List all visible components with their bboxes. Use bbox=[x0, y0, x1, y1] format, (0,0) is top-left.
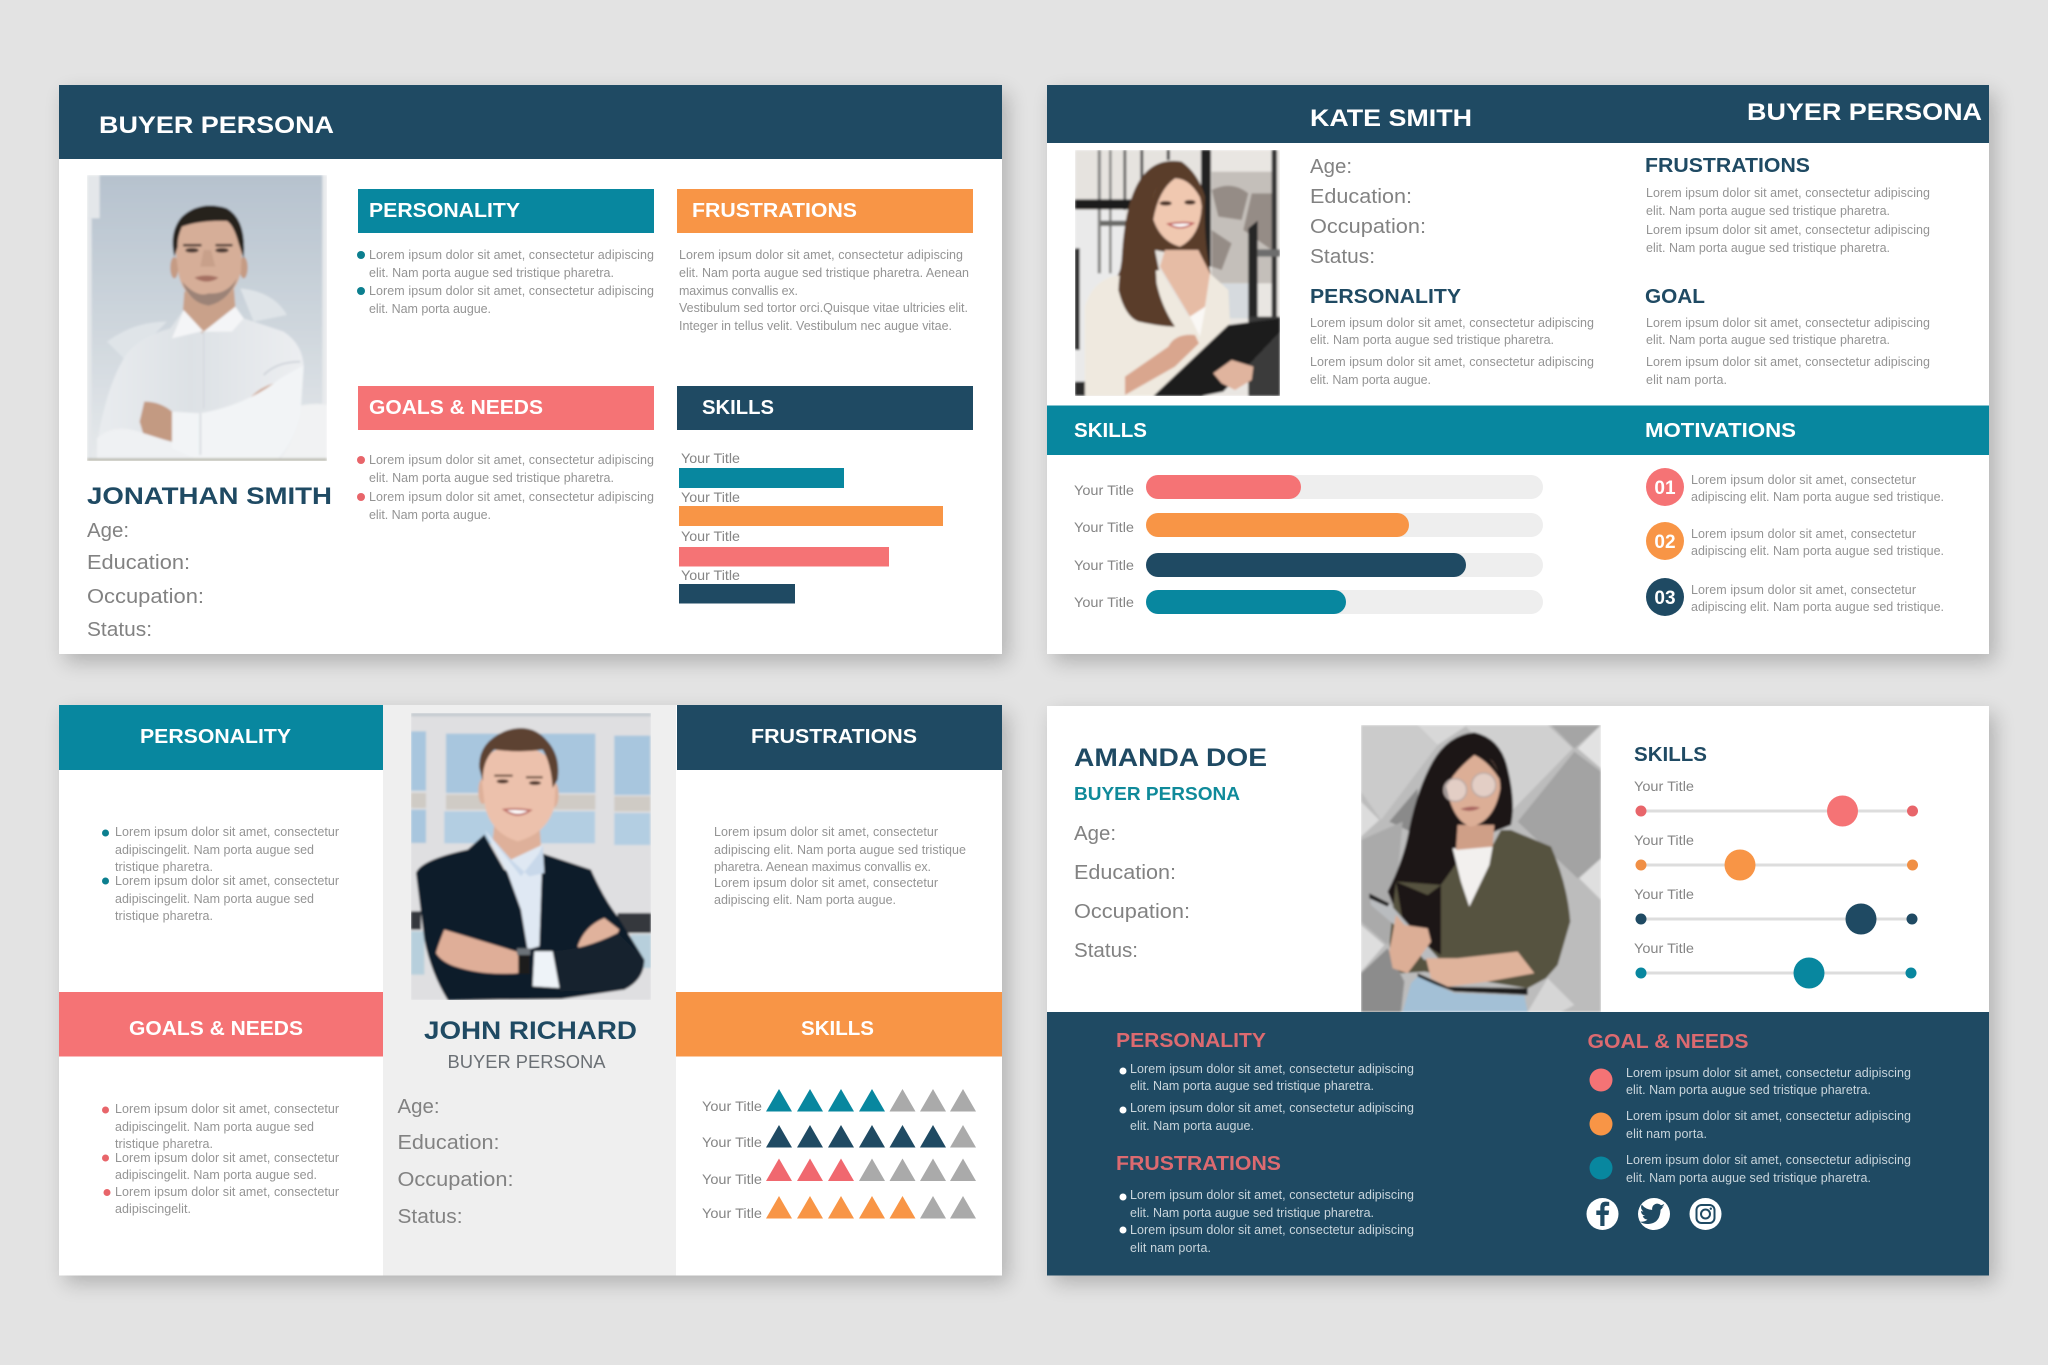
section: frustrations: elit. Nam porta augue sed tristique pharetra. Aenean bbox=[679, 266, 969, 280]
chart: skills sliders: Your Title bbox=[1634, 886, 1694, 902]
section: goals and needs: GOALS & NEEDS bbox=[369, 397, 543, 419]
section: goals and needs: elit. Nam porta augue. bbox=[369, 508, 491, 522]
section: frustrations: Lorem ipsum dolor sit amet, consectetur adipiscing bbox=[1646, 223, 1930, 237]
section: skills triangle rating: Your Title bbox=[702, 1134, 762, 1150]
demographics list: Education: bbox=[398, 1132, 500, 1154]
demographics list: Status: bbox=[398, 1206, 462, 1228]
demographics list bbox=[87, 520, 204, 641]
panel: Jonathan Smith persona bbox=[59, 85, 1008, 662]
section: skills triangle rating bbox=[676, 992, 1002, 1221]
chart: skills sliders: Your Title bbox=[1634, 778, 1694, 794]
list: motivations: adipiscing elit. Nam porta augue sed tristique. bbox=[1691, 600, 1944, 614]
section: personality: elit. Nam porta augue sed tristique pharetra. bbox=[1310, 333, 1554, 347]
demographics list: Age: bbox=[1074, 823, 1116, 845]
demographics list: Occupation: bbox=[87, 586, 204, 608]
section: goal bbox=[1645, 286, 1930, 387]
section: frustrations: elit. Nam porta augue sed tristique pharetra. bbox=[1646, 241, 1890, 255]
band: skills and motivations heading: MOTIVATIONS bbox=[1645, 420, 1796, 442]
section: personality: tristique pharetra. bbox=[115, 909, 213, 923]
name and role bbox=[1074, 744, 1267, 804]
demographics list: Education: bbox=[1074, 862, 1176, 884]
icon: twitter bbox=[1638, 1198, 1670, 1230]
section: goals and needs: adipiscingelit. Nam porta augue sed. bbox=[115, 1168, 317, 1182]
demographics list: Occupation: bbox=[1310, 216, 1426, 238]
list: motivations: adipiscing elit. Nam porta augue sed tristique. bbox=[1691, 544, 1944, 558]
section: goal: elit nam porta. bbox=[1646, 373, 1727, 387]
section: personality: Lorem ipsum dolor sit amet, consectetur adipiscing bbox=[369, 248, 654, 262]
name and role: JOHN RICHARD bbox=[424, 1017, 637, 1045]
section: personality: Lorem ipsum dolor sit amet, consectetur adipiscing bbox=[369, 284, 654, 298]
chart: skills progress bars: Your Title bbox=[1074, 482, 1134, 498]
section: goals and needs: tristique pharetra. bbox=[115, 1137, 213, 1151]
demographics list: Age: bbox=[87, 520, 129, 542]
photo: Amanda portrait bbox=[1361, 725, 1601, 1012]
section: personality: Lorem ipsum dolor sit amet, consectetur adipiscing bbox=[1130, 1062, 1414, 1076]
header bar bbox=[59, 85, 1002, 159]
section: personality: adipiscingelit. Nam porta augue sed bbox=[115, 892, 314, 906]
section: frustrations bbox=[677, 189, 973, 333]
section: personality: Lorem ipsum dolor sit amet, consectetur adipiscing bbox=[1130, 1101, 1414, 1115]
panel: Kate Smith persona bbox=[1047, 85, 1995, 662]
demographics list: Occupation: bbox=[1074, 901, 1190, 923]
demographics list: Status: bbox=[1310, 246, 1375, 268]
panel: John Richard persona bbox=[59, 705, 1008, 1283]
section: frustrations: Vestibulum sed tortor orci.Quisque vitae ultricies elit. bbox=[679, 301, 968, 315]
section: goal and needs: elit. Nam porta augue sed tristique pharetra. bbox=[1626, 1171, 1871, 1185]
section: goal and needs bbox=[1588, 1031, 1911, 1185]
section: goal and needs: Lorem ipsum dolor sit amet, consectetur adipiscing bbox=[1626, 1066, 1911, 1080]
section: frustrations: elit nam porta. bbox=[1130, 1241, 1211, 1255]
section: frustrations: Lorem ipsum dolor sit amet, consectetur adipiscing bbox=[1130, 1188, 1414, 1202]
section: goal and needs: Lorem ipsum dolor sit amet, consectetur adipiscing bbox=[1626, 1109, 1911, 1123]
band: skills and motivations heading bbox=[1047, 406, 1989, 455]
section: goal and needs: GOAL & NEEDS bbox=[1588, 1031, 1748, 1053]
section: goal: Lorem ipsum dolor sit amet, consectetur adipiscing bbox=[1646, 355, 1930, 369]
section: skills bar chart: Your Title bbox=[681, 489, 740, 505]
section: goal and needs: elit nam porta. bbox=[1626, 1127, 1707, 1141]
section: personality: elit. Nam porta augue sed tristique pharetra. bbox=[369, 266, 614, 280]
section: skills bar chart: SKILLS bbox=[702, 397, 774, 419]
section: personality: elit. Nam porta augue. bbox=[369, 302, 491, 316]
section: personality: elit. Nam porta augue. bbox=[1310, 373, 1431, 387]
section: skills triangle rating: Your Title bbox=[702, 1205, 762, 1221]
section: personality: Lorem ipsum dolor sit amet, consectetur bbox=[115, 825, 339, 839]
section: goals and needs: elit. Nam porta augue sed tristique pharetra. bbox=[369, 471, 614, 485]
demographics list: Status: bbox=[87, 619, 152, 641]
demographics list: Age: bbox=[1310, 156, 1352, 178]
name and role: BUYER PERSONA bbox=[1074, 784, 1240, 804]
chart: skills sliders: Your Title bbox=[1634, 940, 1694, 956]
section: frustrations: pharetra. Aenean maximus convallis ex. bbox=[714, 860, 931, 874]
section: goal and needs: Lorem ipsum dolor sit amet, consectetur adipiscing bbox=[1626, 1153, 1911, 1167]
section: personality bbox=[1310, 286, 1594, 387]
section: skills bar chart bbox=[677, 386, 973, 604]
section: goals and needs: Lorem ipsum dolor sit amet, consectetur bbox=[115, 1102, 339, 1116]
name: JONATHAN SMITH bbox=[87, 483, 332, 510]
section: personality: adipiscingelit. Nam porta augue sed bbox=[115, 843, 314, 857]
section: personality: PERSONALITY bbox=[140, 726, 292, 748]
section: personality: PERSONALITY bbox=[1310, 286, 1462, 308]
chart: skills progress bars: Your Title bbox=[1074, 519, 1134, 535]
demographics list: Education: bbox=[87, 552, 190, 574]
header bar: BUYER PERSONA bbox=[99, 112, 334, 139]
section: goals and needs: Lorem ipsum dolor sit amet, consectetur adipiscing bbox=[369, 490, 654, 504]
name and role bbox=[424, 1017, 637, 1072]
chart: skills sliders: Your Title bbox=[1634, 832, 1694, 848]
list: motivations: adipiscing elit. Nam porta augue sed tristique. bbox=[1691, 490, 1944, 504]
section: goal and needs: elit. Nam porta augue sed tristique pharetra. bbox=[1626, 1083, 1871, 1097]
section: frustrations bbox=[677, 705, 1002, 907]
name and role: BUYER PERSONA bbox=[448, 1052, 606, 1072]
section: skills triangle rating: SKILLS bbox=[801, 1018, 874, 1040]
demographics list bbox=[1310, 156, 1426, 268]
section: personality: Lorem ipsum dolor sit amet, consectetur bbox=[115, 874, 339, 888]
section: frustrations bbox=[1116, 1153, 1414, 1255]
section: frustrations: FRUSTRATIONS bbox=[1645, 155, 1810, 177]
section: personality: elit. Nam porta augue sed tristique pharetra. bbox=[1130, 1079, 1374, 1093]
section: skills triangle rating: Your Title bbox=[702, 1098, 762, 1114]
chart: skills progress bars bbox=[1074, 475, 1543, 614]
section: frustrations: adipiscing elit. Nam porta augue sed tristique bbox=[714, 843, 966, 857]
demographics list bbox=[1074, 823, 1190, 962]
chart: skills sliders bbox=[1634, 744, 1918, 988]
icon: facebook bbox=[1586, 1198, 1618, 1230]
section: goals and needs bbox=[59, 992, 383, 1216]
section: frustrations: Lorem ipsum dolor sit amet, consectetur adipiscing bbox=[1646, 186, 1930, 200]
section: personality: Lorem ipsum dolor sit amet, consectetur adipiscing bbox=[1310, 316, 1594, 330]
section: frustrations: adipiscing elit. Nam porta augue. bbox=[714, 893, 896, 907]
icon: instagram bbox=[1690, 1198, 1722, 1230]
section: personality: tristique pharetra. bbox=[115, 860, 213, 874]
list: motivations bbox=[1646, 468, 1944, 616]
list: motivations: Lorem ipsum dolor sit amet, consectetur bbox=[1691, 527, 1916, 541]
list: motivations: 03 bbox=[1654, 588, 1676, 609]
section: goal: GOAL bbox=[1645, 286, 1705, 308]
section: skills bar chart: Your Title bbox=[681, 567, 740, 583]
demographics list: Status: bbox=[1074, 940, 1138, 962]
section: frustrations: FRUSTRATIONS bbox=[692, 200, 857, 222]
section: frustrations: FRUSTRATIONS bbox=[751, 726, 917, 748]
section: goals and needs: GOALS & NEEDS bbox=[129, 1018, 303, 1040]
list: motivations: 01 bbox=[1654, 478, 1676, 499]
band: skills and motivations heading: SKILLS bbox=[1074, 420, 1147, 442]
section: frustrations: Lorem ipsum dolor sit amet, consectetur adipiscing bbox=[679, 248, 963, 262]
section: goal: elit. Nam porta augue sed tristique pharetra. bbox=[1646, 333, 1890, 347]
section: goals and needs: adipiscingelit. Nam porta augue sed bbox=[115, 1120, 314, 1134]
section: frustrations: elit. Nam porta augue sed tristique pharetra. bbox=[1130, 1206, 1374, 1220]
demographics list bbox=[398, 1096, 514, 1228]
photo: John portrait bbox=[411, 713, 651, 1000]
chart: skills sliders: SKILLS bbox=[1634, 744, 1707, 766]
section: frustrations: Lorem ipsum dolor sit amet, consectetur bbox=[714, 825, 938, 839]
section: personality: PERSONALITY bbox=[1116, 1030, 1267, 1052]
section: frustrations: Integer in tellus velit. Vestibulum nec augue vitae. bbox=[679, 319, 952, 333]
photo: Kate portrait bbox=[1075, 150, 1280, 397]
section: frustrations: elit. Nam porta augue sed tristique pharetra. bbox=[1646, 204, 1890, 218]
section: personality bbox=[59, 705, 383, 923]
section: goals and needs bbox=[357, 386, 654, 522]
header bar: BUYER PERSONA bbox=[1747, 99, 1982, 126]
section: personality bbox=[357, 189, 654, 316]
section: frustrations: Lorem ipsum dolor sit amet, consectetur adipiscing bbox=[1130, 1223, 1414, 1237]
panel: Amanda Doe persona bbox=[1047, 706, 1995, 1283]
header bar bbox=[1047, 85, 1989, 143]
section: goals and needs: adipiscingelit. bbox=[115, 1202, 191, 1216]
header bar: KATE SMITH bbox=[1310, 105, 1472, 132]
section: goal: Lorem ipsum dolor sit amet, consectetur adipiscing bbox=[1646, 316, 1930, 330]
chart: skills progress bars: Your Title bbox=[1074, 594, 1134, 610]
section: skills triangle rating: Your Title bbox=[702, 1171, 762, 1187]
photo: Jonathan portrait bbox=[87, 175, 327, 461]
section: personality bbox=[1116, 1030, 1414, 1133]
section: skills bar chart: Your Title bbox=[681, 528, 740, 544]
section: personality: elit. Nam porta augue. bbox=[1130, 1119, 1254, 1133]
demographics list: Occupation: bbox=[398, 1169, 514, 1191]
section: frustrations: Lorem ipsum dolor sit amet, consectetur bbox=[714, 876, 938, 890]
list: motivations: Lorem ipsum dolor sit amet, consectetur bbox=[1691, 583, 1916, 597]
list: motivations: Lorem ipsum dolor sit amet, consectetur bbox=[1691, 473, 1916, 487]
section: skills bar chart: Your Title bbox=[681, 450, 740, 466]
section: frustrations bbox=[1645, 155, 1930, 255]
name and role: AMANDA DOE bbox=[1074, 744, 1267, 772]
demographics list: Education: bbox=[1310, 186, 1412, 208]
section: goals and needs: Lorem ipsum dolor sit amet, consectetur bbox=[115, 1185, 339, 1199]
demographics list: Age: bbox=[398, 1096, 440, 1118]
section: frustrations: FRUSTRATIONS bbox=[1116, 1153, 1281, 1175]
section: personality: Lorem ipsum dolor sit amet, consectetur adipiscing bbox=[1310, 355, 1594, 369]
section: goals and needs: Lorem ipsum dolor sit amet, consectetur adipiscing bbox=[369, 453, 654, 467]
list: motivations: 02 bbox=[1654, 532, 1676, 553]
section: frustrations: maximus convallis ex. bbox=[679, 284, 798, 298]
section: personality: PERSONALITY bbox=[369, 200, 521, 222]
chart: skills progress bars: Your Title bbox=[1074, 557, 1134, 573]
section: goals and needs: Lorem ipsum dolor sit amet, consectetur bbox=[115, 1151, 339, 1165]
